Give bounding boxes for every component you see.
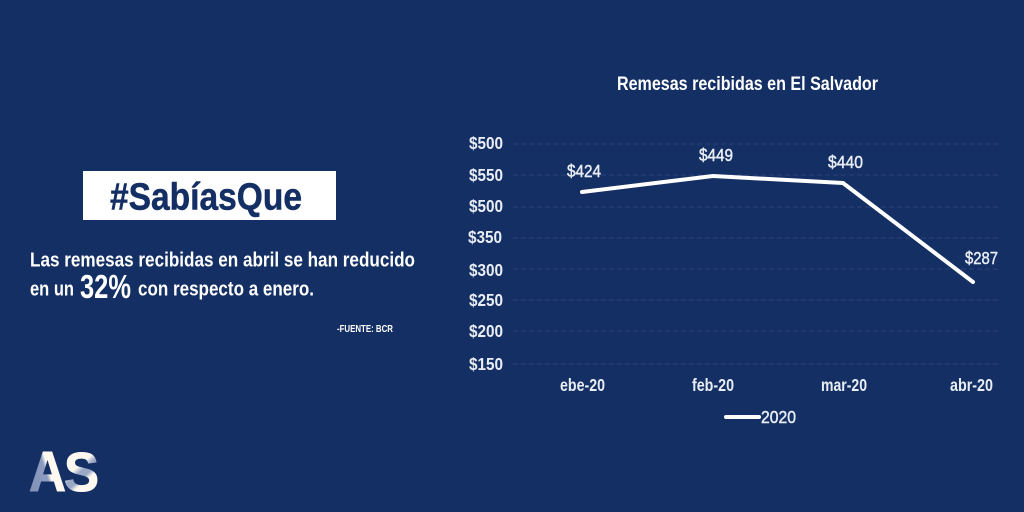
y axis labels: $500 [469,196,503,216]
logo: AS: A [29,440,66,504]
y axis labels: $550 [469,165,503,185]
x axis labels: abr-20 [950,375,993,395]
y axis labels: $300 [469,260,503,280]
text block: key message: en un [30,278,74,300]
data line 2020 [582,176,973,282]
data labels [567,145,998,268]
source note: -FUENTE: BCR [337,324,394,335]
y axis labels: $200 [469,321,503,341]
data labels: $440 [828,152,863,172]
x axis labels [560,375,993,395]
text block: key message: 32% [80,268,131,305]
x axis labels: mar-20 [821,375,867,395]
x axis labels: feb-20 [692,375,734,395]
text block: key message: Las remesas recibidas en abril se han reducido [30,250,415,272]
logo: AS [29,440,99,504]
logo: AS: S [64,441,99,503]
y axis labels: $150 [469,354,503,374]
y axis labels [468,133,503,374]
legend: 2020 [761,407,796,427]
chart title: Remesas recibidas en El Salvador [617,74,879,95]
chart gridlines [513,144,998,364]
x axis labels: ebe-20 [560,375,605,395]
data labels: $424 [567,161,601,181]
panel: hashtag label: #SabíasQue [110,176,302,218]
y axis labels: $250 [469,290,503,310]
data labels: $287 [965,248,998,268]
line chart [468,133,998,427]
y axis labels: $500 [469,133,503,153]
text block: key message: con respecto a enero. [138,278,314,300]
y axis labels: $350 [468,227,502,247]
text block: key message [30,250,415,305]
legend [726,407,796,427]
data labels: $449 [699,145,733,165]
